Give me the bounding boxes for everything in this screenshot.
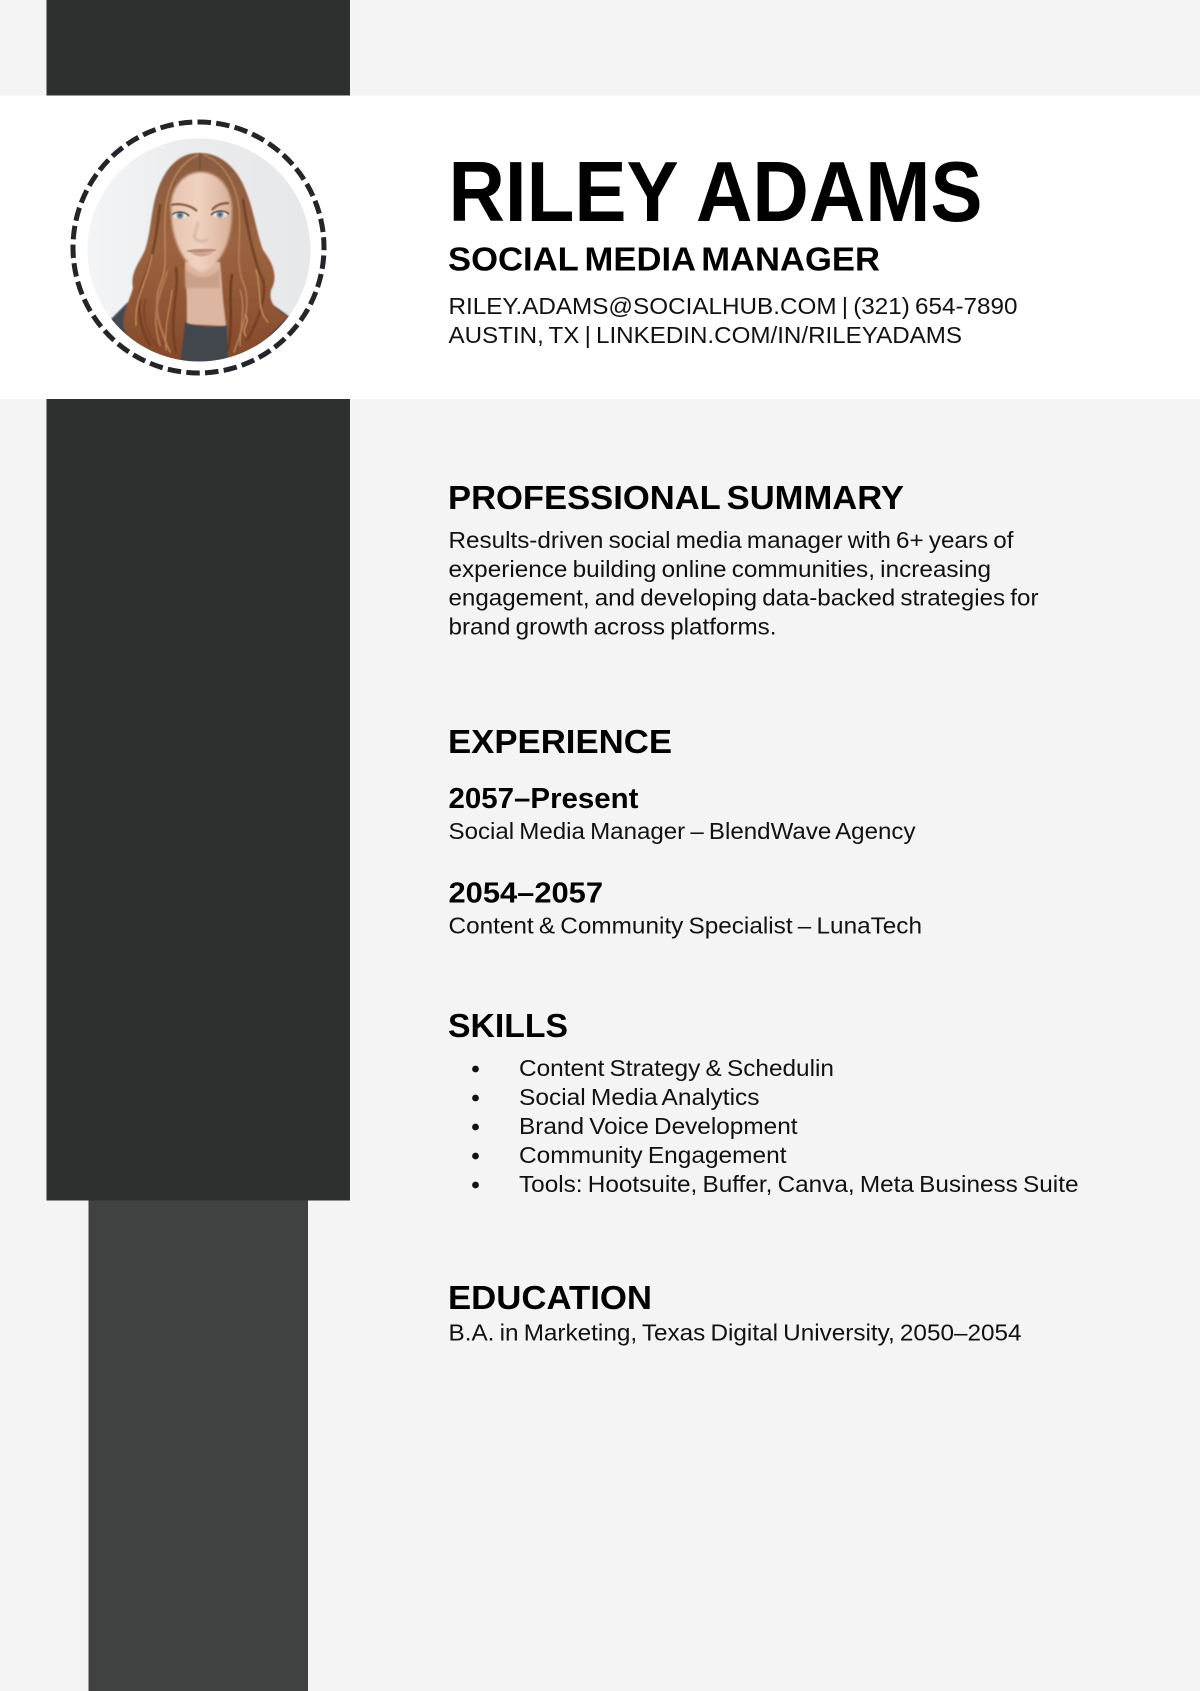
skills list: Social Media Analytics	[519, 1084, 760, 1110]
heading: skills: SKILLS	[448, 1007, 568, 1044]
header band	[0, 96, 1200, 399]
job entry 1: Social Media Manager – BlendWave Agency	[448, 818, 916, 844]
section: education	[448, 1279, 1022, 1346]
photo dashed ring	[73, 122, 324, 373]
summary paragraph: Results-driven social media manager with 6+ years of	[448, 527, 1014, 553]
heading: experience: EXPERIENCE	[448, 723, 672, 760]
skills list: Content Strategy & Schedulin	[519, 1055, 834, 1081]
skills list	[472, 1055, 1079, 1197]
contact details	[448, 293, 1018, 348]
job entry 2: Content & Community Specialist – LunaTech	[448, 912, 922, 938]
summary paragraph: experience building online communities, increasing	[448, 556, 991, 582]
job entry 1: 2057–Present	[448, 783, 639, 815]
skills list: Brand Voice Development	[519, 1113, 798, 1139]
job entry 2	[448, 878, 922, 938]
heading: education: EDUCATION	[448, 1279, 652, 1316]
name heading: RILEY ADAMS	[448, 145, 982, 240]
section: skills	[448, 1007, 1078, 1197]
education detail: B.A. in Marketing, Texas Digital University, 2050–2054	[448, 1320, 1022, 1346]
section: professional summary	[448, 479, 1039, 640]
summary paragraph: brand growth across platforms.	[448, 614, 776, 640]
summary paragraph	[448, 527, 1039, 640]
heading: professional summary: PROFESSIONAL SUMMARY	[448, 479, 904, 516]
sidebar: top dark block	[46, 0, 350, 96]
skills list: Tools: Hootsuite, Buffer, Canva, Meta Business Suite	[519, 1171, 1078, 1197]
profile photo	[85, 136, 313, 364]
job entry 2: 2054–2057	[448, 878, 603, 910]
sidebar: lower lighter column	[88, 1200, 308, 1691]
sidebar: main dark column	[46, 399, 350, 1200]
contact details: RILEY.ADAMS@SOCIALHUB.COM | (321) 654-7890	[448, 293, 1018, 319]
summary paragraph: engagement, and developing data-backed strategies for	[448, 584, 1039, 610]
skills list: Community Engagement	[519, 1142, 787, 1168]
job entry 1	[448, 783, 916, 844]
section: experience	[448, 723, 922, 938]
job title: SOCIAL MEDIA MANAGER	[448, 240, 880, 278]
contact details: AUSTIN, TX | LINKEDIN.COM/IN/RILEYADAMS	[448, 322, 962, 348]
